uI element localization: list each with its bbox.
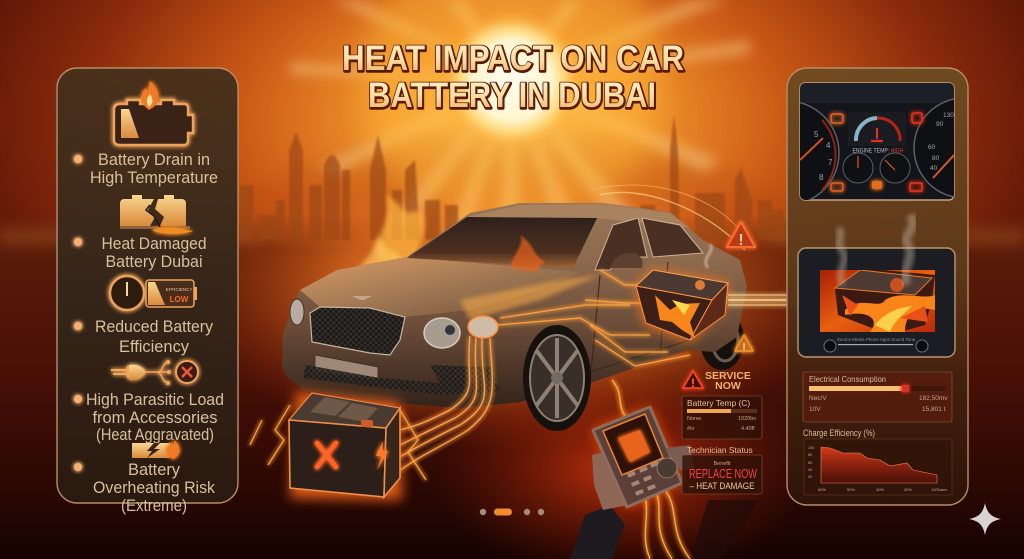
sleeve — [570, 505, 625, 559]
small label: Benefit — [713, 461, 731, 467]
screen battery — [835, 268, 935, 335]
bolt mark — [376, 441, 388, 470]
exclamation: ! — [691, 376, 695, 390]
label: overheating risk: (Extreme) — [121, 496, 187, 515]
lid ridges — [310, 397, 378, 422]
keypad — [627, 461, 659, 496]
title: BATTERY IN DUBAI — [368, 76, 656, 115]
grille — [310, 307, 405, 355]
lava flows — [845, 295, 935, 332]
tablet glow — [593, 407, 682, 507]
label: battery drain: Battery Drain in — [98, 150, 210, 169]
terminal — [695, 280, 705, 290]
lava cracks — [655, 295, 700, 338]
left headlight — [290, 299, 304, 325]
y axis labels: 100 — [808, 446, 814, 450]
glowing lamp disk — [468, 316, 498, 338]
warning triangle: upper: ! — [738, 232, 744, 249]
right gauge: 90 — [936, 121, 944, 128]
gauge needles — [858, 156, 895, 170]
icon: gauge and low efficiency battery — [110, 276, 197, 310]
lower intake — [303, 365, 500, 395]
bullet — [74, 155, 82, 163]
bar — [809, 386, 945, 391]
bottom buttons: Source Media Phone Apps Sound Tone — [837, 337, 916, 342]
row 2: #tv — [687, 426, 695, 432]
corner star — [969, 503, 1001, 535]
x axis labels: 40% — [876, 487, 884, 492]
lightning around battery — [250, 405, 426, 480]
y axis labels: 80 — [808, 453, 812, 457]
status box — [682, 455, 762, 494]
rear wheel — [700, 310, 744, 370]
panel background — [57, 68, 238, 503]
replace now: REPLACE NOW — [689, 467, 757, 481]
right gauge: 80 — [932, 155, 940, 162]
center display — [854, 116, 902, 142]
title: HEAT IMPACT ON CAR — [342, 39, 684, 78]
warning triangle: small — [735, 335, 753, 353]
row 2: 4.40ff — [741, 426, 755, 432]
label: battery drain: High Temperature — [90, 168, 218, 187]
status heading: Technician Status — [687, 445, 753, 455]
X mark — [317, 443, 336, 467]
hood highlight — [300, 257, 580, 317]
left gauge: 7 — [828, 158, 833, 167]
screen battery — [618, 430, 650, 462]
battery temp box — [682, 396, 762, 439]
mirror — [610, 253, 643, 268]
warning triangle: small: ! — [742, 342, 746, 353]
label: parasitic load: from Accessories — [92, 408, 218, 427]
dead battery — [250, 392, 426, 500]
lava screen — [820, 270, 935, 332]
label: parasitic load: (Heat Aggravated) — [96, 425, 214, 444]
label: parasitic load: High Parasitic Load — [86, 390, 224, 409]
small gauges — [843, 153, 910, 183]
instrument cluster — [799, 82, 955, 201]
bullet — [74, 463, 82, 471]
row 1: 1020bn — [738, 416, 756, 422]
heat damage: – HEAT DAMAGE — [690, 481, 754, 492]
battery lid — [636, 270, 728, 300]
Dubai skyline silhouette — [240, 115, 784, 240]
row 1: 182,50mv — [919, 395, 948, 402]
label: overheating risk: Battery — [128, 460, 180, 479]
battery front — [289, 420, 386, 497]
left gauge — [800, 102, 840, 200]
heading: Battery Temp (C) — [687, 398, 750, 408]
car — [282, 203, 747, 431]
y axis labels: 60 — [808, 461, 812, 465]
chart title: Charge Efficiency (%) — [803, 428, 875, 438]
door seams — [590, 262, 690, 383]
row 2: 15,801 t — [922, 406, 946, 413]
terminal — [361, 420, 373, 427]
warning lights — [831, 113, 922, 191]
smoke left — [838, 228, 844, 285]
d-pad — [657, 458, 677, 478]
x axis labels: 50% — [847, 487, 855, 492]
badge — [352, 296, 372, 300]
y axis labels: 20 — [808, 475, 812, 479]
row 1: Nonw — [687, 416, 701, 422]
panel: left causes — [57, 68, 238, 515]
roof highlight — [467, 204, 690, 228]
battery front face — [636, 286, 712, 340]
hand — [592, 448, 628, 510]
level bar — [687, 409, 757, 413]
service now warning — [683, 370, 751, 392]
icon: gauge and low efficiency battery: EFFICIENCY — [166, 287, 192, 292]
label: reduced efficiency: Efficiency — [119, 337, 189, 356]
label: overheating risk: Overheating Risk — [93, 478, 215, 497]
vertical heat line — [876, 200, 878, 371]
cabin fire reflection — [510, 235, 545, 272]
technician status — [682, 445, 762, 494]
service now text: NOW — [715, 380, 741, 392]
side streak — [460, 275, 600, 320]
battery side — [384, 408, 400, 497]
number plate — [315, 355, 378, 380]
hot battery on car — [636, 244, 728, 342]
panel background — [787, 68, 968, 505]
bullet — [74, 238, 82, 246]
label: heat damaged: Battery Dubai — [106, 252, 202, 271]
thumb — [665, 445, 695, 470]
left gauge: 4 — [826, 141, 831, 150]
headlight — [424, 318, 460, 348]
device screen — [603, 414, 663, 475]
right gauge: 60 — [928, 144, 936, 151]
front wheel — [523, 325, 591, 431]
side windows — [595, 218, 703, 270]
circuit heat lines from car to hot battery — [498, 270, 690, 366]
right gauge: 130 — [943, 112, 954, 119]
right gauge: 40 — [930, 165, 938, 172]
x axis labels: 10/Dawn — [931, 487, 947, 492]
y axis labels: 40 — [808, 468, 812, 472]
icon: overheating battery — [132, 440, 180, 459]
bullet — [74, 395, 82, 403]
heading: Electrical Consumption — [809, 374, 886, 384]
chart frame — [804, 439, 952, 495]
panel: right diagnostics — [786, 67, 969, 506]
heat wires out of tablet — [612, 380, 690, 559]
infotainment screen — [798, 215, 955, 357]
flames around the car — [345, 185, 745, 290]
smoke — [706, 244, 711, 268]
sun with rays — [290, 0, 750, 260]
left gauge: 5 — [814, 130, 819, 139]
smoke right — [905, 215, 913, 285]
device body — [593, 407, 682, 507]
title: BATTERY IN DUBAI — [369, 77, 657, 116]
battery side face — [690, 283, 728, 340]
heat arrow to right panel — [728, 295, 820, 305]
bullet — [74, 322, 82, 330]
bottom buttons — [824, 337, 928, 352]
title: HEAT IMPACT ON CAR — [343, 40, 685, 79]
x axis labels: 60% — [818, 487, 826, 492]
area series — [821, 447, 937, 483]
chart: charge efficiency — [803, 428, 952, 495]
icon: cracked battery — [120, 195, 193, 234]
left gauge: 8 — [819, 173, 824, 182]
technician tablet with hands — [570, 380, 760, 559]
warning triangle — [683, 371, 703, 388]
warning triangle: upper — [727, 222, 755, 249]
row 2: 10V — [809, 406, 821, 413]
right sleeve — [690, 500, 760, 559]
title — [342, 39, 685, 116]
pagination dots — [480, 508, 544, 516]
right gauge — [913, 98, 954, 198]
windscreen — [407, 217, 597, 268]
icon: gauge and low efficiency battery: LOW — [170, 295, 189, 304]
row 1: Nec/V — [809, 395, 827, 402]
icon: plug and disconnect — [111, 360, 198, 385]
electrical consumption table — [803, 372, 952, 422]
battery lid — [289, 393, 400, 428]
label: reduced efficiency: Reduced Battery — [95, 317, 213, 336]
engine temp text: ENGINE TEMP: HIGH — [852, 148, 904, 154]
service now text: SERVICE — [705, 370, 751, 382]
icon: battery with flame — [114, 81, 193, 145]
car body — [282, 203, 747, 408]
x axis labels: 30% — [904, 487, 912, 492]
wires from lamp to left battery — [398, 336, 492, 472]
label: heat damaged: Heat Damaged — [102, 234, 206, 253]
